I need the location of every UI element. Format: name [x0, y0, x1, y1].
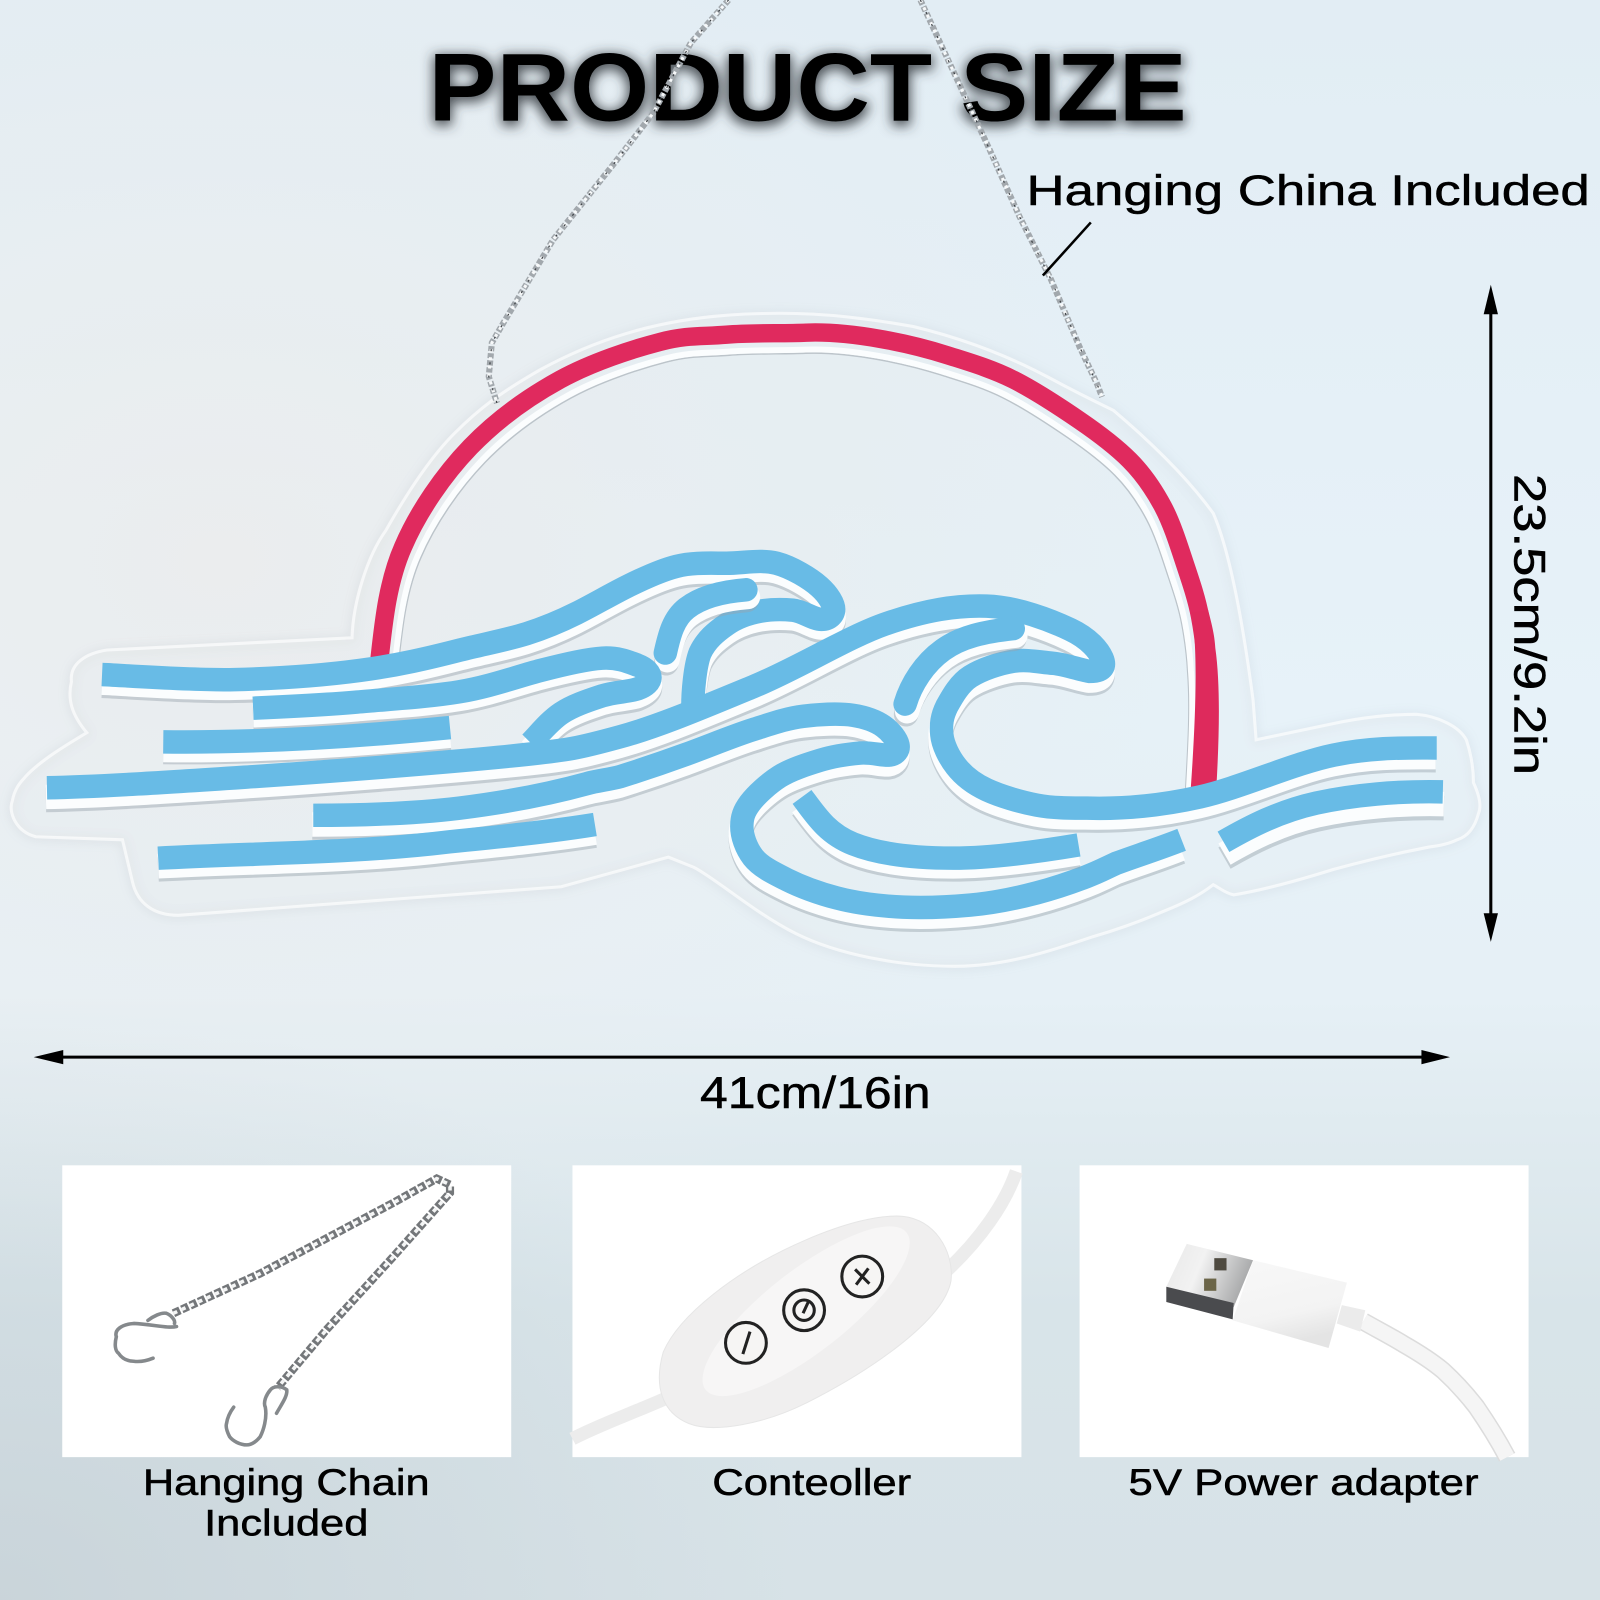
panel: hanging chain [62, 1165, 511, 1457]
callout: hanging chain included: Hanging China Included [1027, 167, 1590, 215]
wave tube: right curl [905, 629, 1015, 714]
button recess [680, 1201, 932, 1422]
label: hanging chain included: Included [204, 1503, 368, 1544]
callout: hanging chain included [1027, 167, 1590, 276]
wave tube: second stripe [253, 658, 650, 753]
wave tube: top crest [102, 561, 834, 717]
wave tube: small inner curl [665, 590, 748, 663]
width dimension arrow [34, 1050, 1450, 1064]
height label: 23.5cm/9.2in [1504, 474, 1555, 775]
wave tube: lower long wave [312, 714, 1182, 920]
button: power [784, 1290, 824, 1331]
wave tube: inner curve [802, 797, 1079, 869]
hanging chains [489, 0, 1102, 403]
wave tube: short stripe [163, 728, 450, 752]
controller cord [572, 1171, 1016, 1439]
button: minus [726, 1322, 766, 1363]
label: hanging chain included: Hanging Chain [143, 1462, 430, 1503]
title: PRODUCT SIZE [429, 32, 1187, 141]
wave tube: right lower stripe [1223, 792, 1444, 858]
chain hooks [115, 1313, 287, 1445]
label: hanging chain included [143, 1462, 430, 1544]
usb plug boot [1233, 1260, 1347, 1348]
label: controller: Conteoller [712, 1462, 911, 1503]
button: plus [842, 1256, 883, 1297]
panel: controller [572, 1165, 1021, 1457]
wave tube: bottom stripe [158, 824, 595, 869]
usb cable [1363, 1321, 1507, 1457]
height dimension arrow [1484, 285, 1498, 942]
width label: 41cm/16in [700, 1067, 931, 1118]
usb plug metal [1166, 1244, 1253, 1319]
panel: usb adapter [1080, 1165, 1529, 1457]
usb neck [1337, 1305, 1365, 1332]
chain strands [173, 1179, 450, 1388]
neon sign: waves and sun [11, 313, 1480, 966]
wave tube: main long wave [46, 606, 1437, 821]
red sun arc [380, 332, 1219, 788]
acrylic backing board [11, 313, 1480, 966]
label: power adapter: 5V Power adapter [1129, 1462, 1479, 1503]
controller body [659, 1216, 951, 1427]
